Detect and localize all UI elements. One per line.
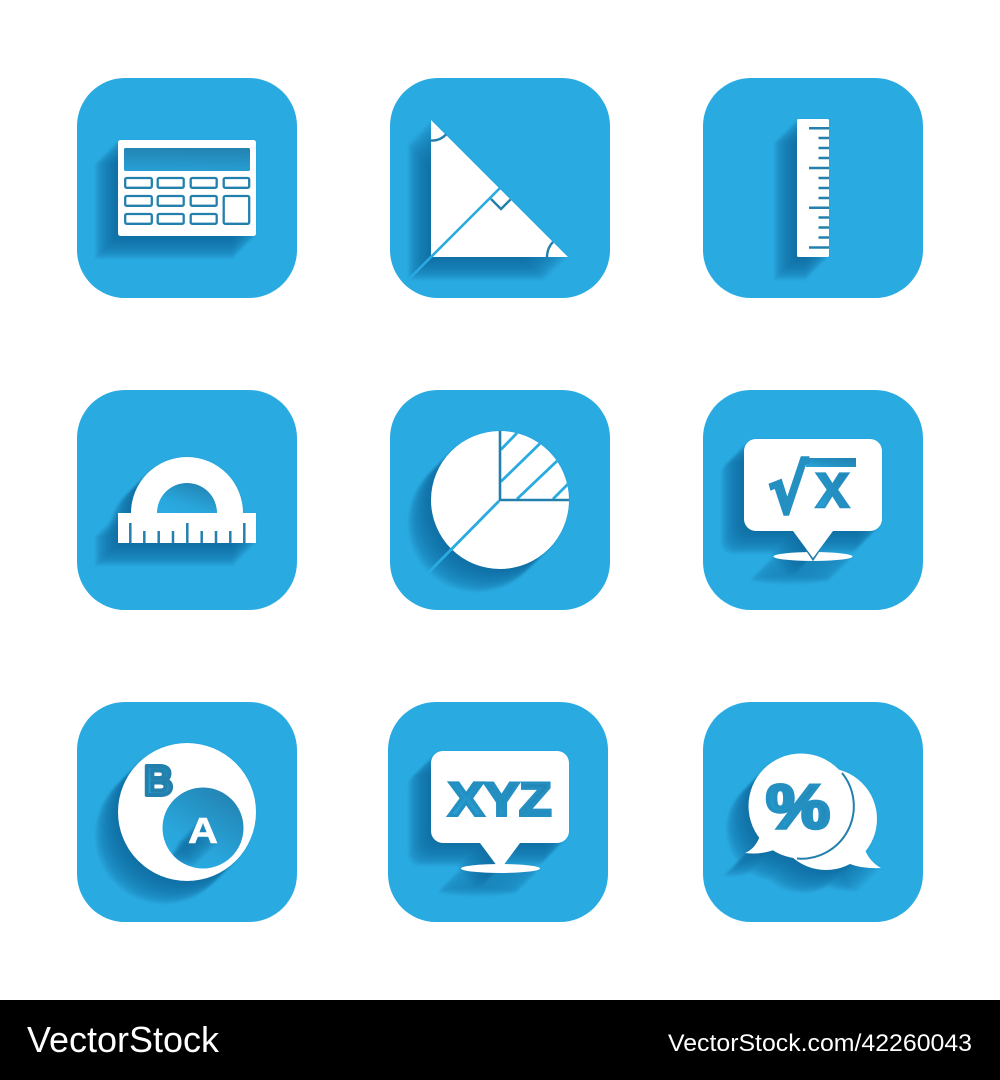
- icon: speech pin with XYZ: [431, 751, 569, 873]
- icon: protractor: [118, 457, 256, 543]
- letter A: A: [188, 810, 218, 851]
- image id: VectorStock.com/42260043: [668, 1030, 972, 1057]
- icon: speech pin with square root of x: [744, 439, 882, 561]
- formula: root of x: [768, 448, 850, 529]
- panel: ruler icon tile: [703, 78, 923, 298]
- icon: right triangle with altitude: [409, 120, 568, 279]
- formula: root of x: √: [768, 452, 809, 529]
- icon: venn circles: [118, 743, 256, 881]
- icon: hatched pie chart: [428, 431, 569, 573]
- panel: right triangle icon tile: [390, 78, 610, 298]
- formula: root of x: x: [815, 448, 850, 522]
- icon: calculator: [118, 140, 256, 236]
- label XYZ: XYZ: [448, 772, 552, 826]
- panel: protractor icon tile: [77, 390, 297, 610]
- brand name: VectorStock: [27, 1019, 220, 1060]
- panel: percent chat bubbles tile: [703, 702, 923, 922]
- percent sign: %: [766, 773, 830, 842]
- icon: back speech bubble: [775, 768, 881, 870]
- letter B: B: [144, 757, 173, 804]
- panel: pie chart icon tile: [390, 390, 610, 610]
- icon: front speech bubble: [745, 754, 854, 859]
- footer bar: [0, 1000, 1000, 1080]
- icon: ruler: [797, 119, 829, 257]
- panel: square root speech pin tile: [703, 390, 923, 610]
- panel: sets A and B icon tile: [77, 702, 297, 922]
- vinculum of the root sign: [806, 458, 856, 467]
- panel: XYZ speech pin tile: [388, 702, 608, 922]
- panel: calculator icon tile: [77, 78, 297, 298]
